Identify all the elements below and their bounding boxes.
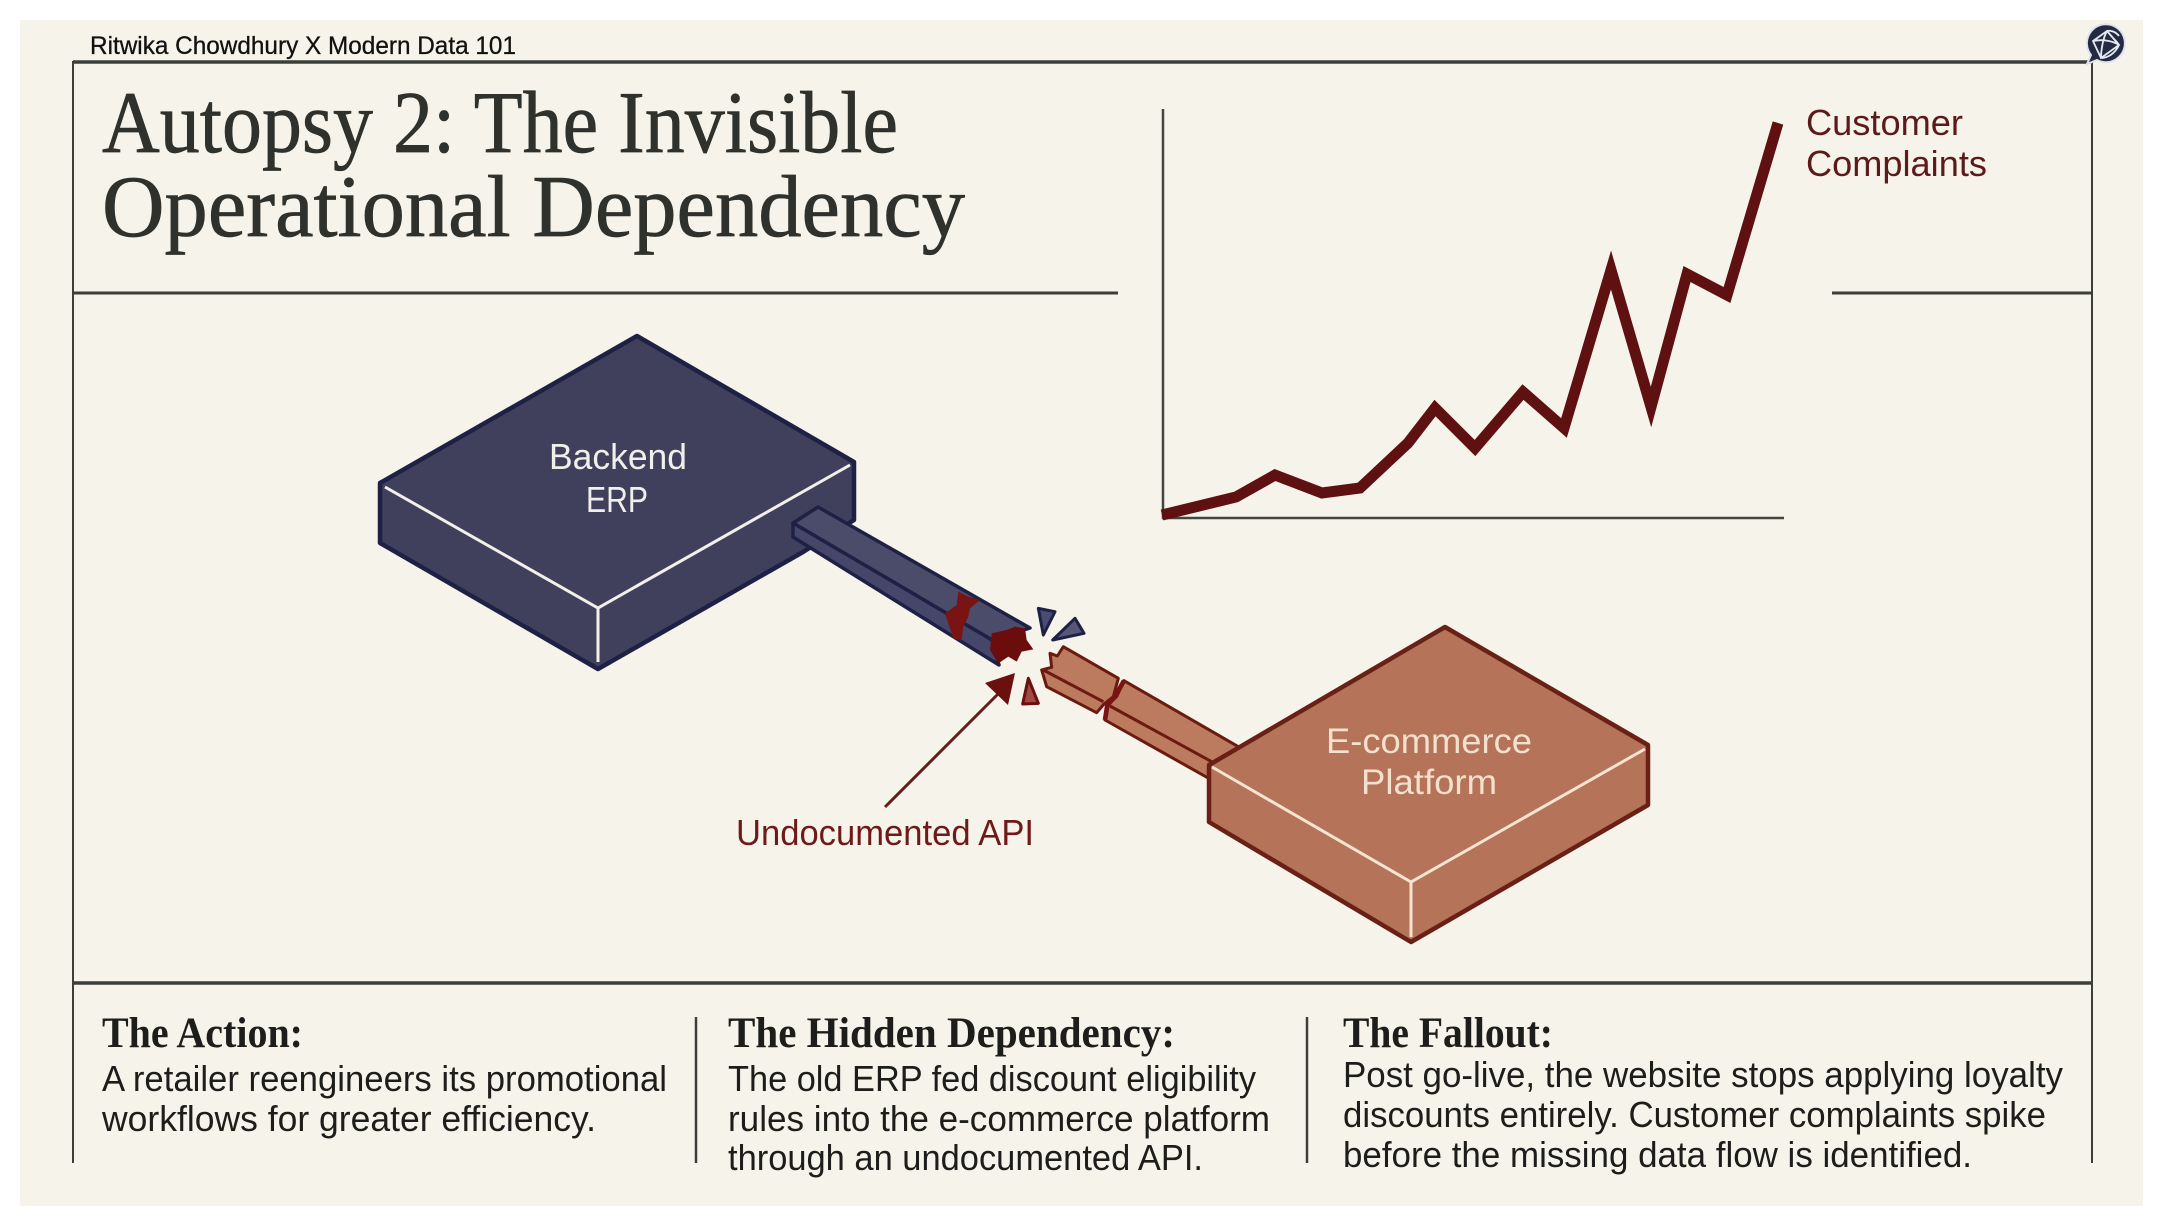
crack on ERP connector	[945, 592, 980, 640]
connector: e-commerce side right piece	[1105, 681, 1238, 780]
box: Backend ERP: Backend	[549, 436, 687, 477]
breakage and shards	[945, 592, 1238, 780]
text block: The Fallout	[1343, 1010, 2063, 1175]
text block: The Hidden Dependency: rules into the e-commerce platform	[728, 1098, 1270, 1139]
chart label: Complaints	[1806, 143, 1987, 184]
text block: The Fallout: The Fallout:	[1343, 1010, 1553, 1057]
connector: ERP side, broken	[793, 507, 1030, 665]
chart label	[1806, 102, 1987, 184]
title: Autopsy 2: The Invisible	[102, 75, 898, 172]
title	[102, 75, 965, 256]
box: E-commerce Platform: Platform	[1361, 763, 1497, 802]
label: undocumented API: Undocumented API	[736, 812, 1034, 853]
text block: The Hidden Dependency: The Hidden Dependency:	[728, 1010, 1175, 1057]
box: E-commerce Platform	[1209, 627, 1648, 942]
text block: The Hidden Dependency: through an undocumented API.	[728, 1137, 1203, 1178]
box: Backend ERP: ERP	[586, 479, 648, 520]
arrow: undocumented API pointer	[885, 673, 1015, 807]
text block: The Action: The Action:	[102, 1010, 303, 1057]
text block: The Fallout: Post go-live, the website stops applying loyalty	[1343, 1054, 2063, 1095]
text block: The Hidden Dependency	[728, 1010, 1270, 1178]
chart label: Customer	[1806, 102, 1963, 143]
chart axes	[1163, 109, 1784, 518]
text block: The Fallout: before the missing data flow is identified.	[1343, 1134, 1972, 1175]
text block: The Action: workflows for greater efficiency.	[101, 1098, 596, 1139]
text block: The Action	[101, 1010, 667, 1139]
ruptured end	[990, 627, 1033, 663]
connector: e-commerce side left piece	[1042, 647, 1118, 713]
byline: Ritwika Chowdhury X Modern Data 101	[90, 32, 516, 60]
column dividers	[696, 1017, 1307, 1163]
text block: The Hidden Dependency: The old ERP fed discount eligibility	[728, 1058, 1256, 1099]
text block: The Fallout: discounts entirely. Customer complaints spike	[1343, 1094, 2046, 1135]
text block: The Action: A retailer reengineers its promotional	[102, 1058, 667, 1099]
shard navy 2	[1053, 618, 1084, 640]
shard red	[1023, 678, 1038, 704]
title: Operational Dependency	[102, 159, 965, 256]
chart line	[1162, 123, 1778, 515]
box: E-commerce Platform: E-commerce	[1326, 722, 1532, 761]
box: Backend ERP	[380, 336, 854, 669]
shard navy 1	[1038, 608, 1055, 635]
icon: speech-bubble network logo	[2087, 24, 2125, 64]
chart: customer complaints	[1162, 102, 1987, 518]
